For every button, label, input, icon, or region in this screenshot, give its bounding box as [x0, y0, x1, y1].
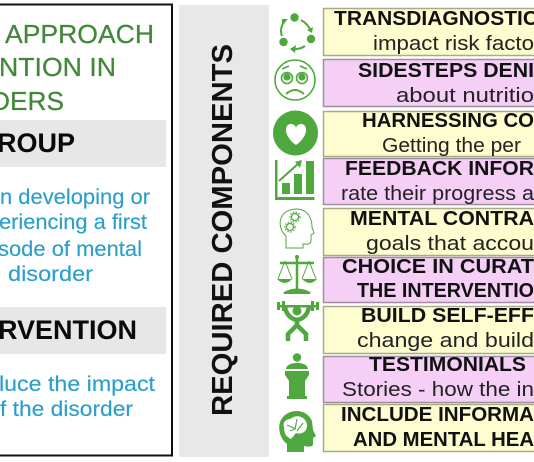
icon: growth chart [275, 160, 314, 200]
row: choice: CHOICE IN CURAT [342, 256, 534, 278]
icon: scales [277, 255, 317, 293]
text block: intervention description: f the disorder [0, 398, 133, 421]
row: sidesteps denial: about nutritio [396, 85, 534, 107]
row: choice [324, 256, 534, 302]
icon: worried face [275, 60, 315, 100]
row: testimonials: TESTIMONIALS [369, 354, 526, 376]
text block: target group description: eriencing a first [0, 211, 147, 234]
icon: heart in circle [273, 110, 318, 156]
row: mental contrasting [324, 208, 534, 256]
component rows [324, 8, 534, 452]
row: self-efficacy: BUILD SELF-EFF [361, 305, 534, 327]
heading: intervention: RVENTION [0, 315, 137, 345]
row: feedback: FEEDBACK INFOR [345, 158, 534, 180]
row: harnessing: HARNESSING CO [362, 110, 534, 132]
row: feedback [324, 158, 534, 205]
heading: intervention [0, 307, 166, 354]
row: self-efficacy [324, 305, 534, 354]
row: transdiagnostic: impact risk facto [373, 33, 534, 55]
row: sidesteps denial [324, 60, 534, 107]
panel: approach [0, 4, 172, 456]
row: transdiagnostic: TRANSDIAGNOSTIC [334, 8, 534, 30]
row: feedback: rate their progress a [341, 183, 534, 205]
title: APPROACH [5, 19, 154, 49]
icon: brain head [279, 411, 316, 452]
text block: intervention description: luce the impact [0, 373, 155, 396]
row: choice: THE INTERVENTIO [357, 280, 534, 302]
text block: intervention description [0, 373, 155, 421]
row: harnessing [324, 110, 534, 157]
row: transdiagnostic [324, 8, 534, 56]
row: testimonials: Stories - how the in [342, 379, 534, 401]
text block: target group description: n developing or [0, 186, 150, 209]
icon: speaker at podium [285, 353, 309, 399]
text block: target group description: sode of mental [0, 238, 142, 261]
icon: weight lifter [277, 301, 319, 341]
row: include information [324, 404, 534, 452]
row: testimonials [324, 354, 534, 402]
row: harnessing: Getting the per [382, 135, 521, 157]
vertical heading: REQUIRED COMPONENTS [207, 44, 239, 416]
text block: target group description [0, 186, 150, 286]
row: include information: INCLUDE INFORMA [341, 404, 534, 426]
title: NTION IN [0, 52, 116, 82]
row: self-efficacy: change and build [357, 330, 534, 352]
icon: cycle [279, 13, 315, 53]
heading: target group [0, 120, 166, 167]
row: mental contrasting: goals that accou [366, 233, 534, 255]
icon: head with gears [280, 209, 314, 248]
row: sidesteps denial: SIDESTEPS DENI [358, 60, 534, 82]
panel: required components sidebar [179, 5, 269, 457]
title [0, 19, 154, 116]
text block: target group description: disorder [8, 263, 93, 286]
row: include information: AND MENTAL HEA [353, 429, 534, 451]
row: mental contrasting: MENTAL CONTRA [350, 208, 534, 230]
